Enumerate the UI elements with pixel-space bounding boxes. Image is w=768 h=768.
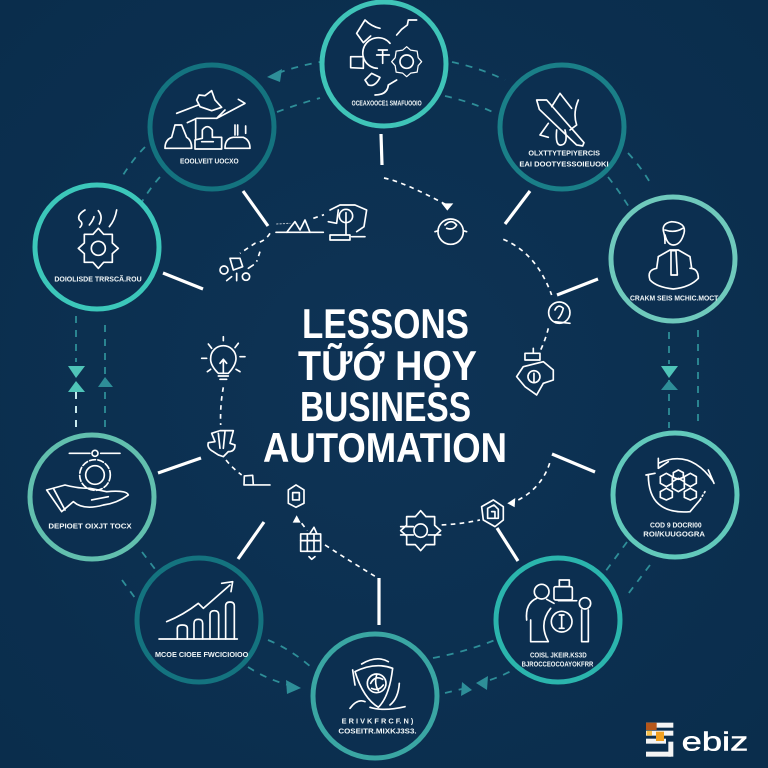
panel: top node	[322, 2, 446, 126]
arrow: cluster to box	[226, 460, 242, 475]
arrow: lower right dashed	[507, 460, 551, 507]
icon: logo mark	[646, 723, 673, 757]
label: EOOLVEIT UOCXO	[180, 157, 239, 166]
icon: small cluster	[220, 258, 253, 281]
panel: right node	[611, 197, 735, 321]
icon: face	[435, 219, 467, 244]
panel: lower-right node	[613, 433, 737, 557]
label: COISL JKEIR.KS3D	[530, 650, 587, 659]
icon: shield: COSEITR.MIXKJ3S3.	[338, 726, 417, 735]
icon: gift	[301, 527, 321, 559]
panel: lower-left node	[30, 435, 154, 559]
arrow: gear to shield	[442, 520, 480, 525]
arrow: gift dashed	[325, 545, 378, 578]
icon: people and badge	[522, 580, 594, 668]
arrow: up triangle	[293, 515, 307, 531]
icon: cycle with molecules: ROI/KUUGOGRA	[643, 530, 706, 539]
icon: valve	[328, 205, 367, 240]
label: COD 9 DOCRI00	[650, 520, 702, 529]
label: DOIOLISDE TRRSCÃ.ROU	[54, 275, 142, 284]
panel: bottom-right node	[496, 558, 620, 682]
label: OCEAXOOCE1 SMAFUOOIO	[352, 99, 422, 108]
icon: shield	[338, 659, 417, 735]
spokes	[158, 134, 598, 625]
icon: cycle with molecules	[643, 458, 714, 539]
panel: left node	[35, 185, 159, 309]
panel: bottom-left node	[137, 558, 261, 682]
label: MCOE CIOEE FWCICIOIOO	[155, 650, 249, 659]
logo: ebiz	[646, 723, 748, 757]
icon: cluster	[208, 431, 235, 457]
arrow: dotted path	[240, 233, 270, 262]
icon: small box	[244, 475, 270, 485]
label: OLXTTYTEPIYERCIS	[528, 148, 600, 157]
title: TỮỚ HỌY	[298, 341, 477, 389]
wordmark: ebiz	[682, 727, 748, 757]
icon: lantern	[288, 485, 304, 507]
panel: top-left node	[150, 65, 274, 189]
arrow: bulb to cluster	[221, 387, 223, 425]
label: CRAKM SEIS MCHIC.MOCT	[630, 294, 719, 303]
icon: tools	[519, 93, 609, 169]
title: LESSONS	[302, 300, 469, 347]
icon: people and badge: BJROCCEOCOAYOKFRR	[522, 659, 594, 668]
icon: gear	[401, 511, 441, 551]
title: AUTOMATION	[263, 424, 507, 471]
label: DEPIOET OIXJT TOCX	[48, 521, 132, 530]
inner workflow icons	[202, 178, 570, 578]
icon: shield badge	[482, 500, 503, 527]
label: E R I V K F R C F. N )	[342, 716, 414, 725]
outer dashed connectors	[68, 62, 698, 696]
icon: tools: EAI DOOTYESSOIEUOKI	[519, 160, 609, 169]
arrow: right dashed short	[541, 328, 548, 350]
arrow: right dashed	[503, 239, 552, 295]
icon: robot	[517, 348, 553, 395]
icon: head circle	[549, 302, 570, 323]
title: BUSINESS	[300, 383, 471, 430]
icon: light bulb	[202, 337, 245, 379]
arrow: graph to valve	[313, 215, 324, 218]
icon: waveform graph	[276, 220, 323, 232]
arrow: top dashed	[384, 178, 453, 211]
panel: bottom node	[313, 634, 437, 758]
title	[263, 300, 507, 471]
panel: top-right node	[500, 65, 624, 189]
